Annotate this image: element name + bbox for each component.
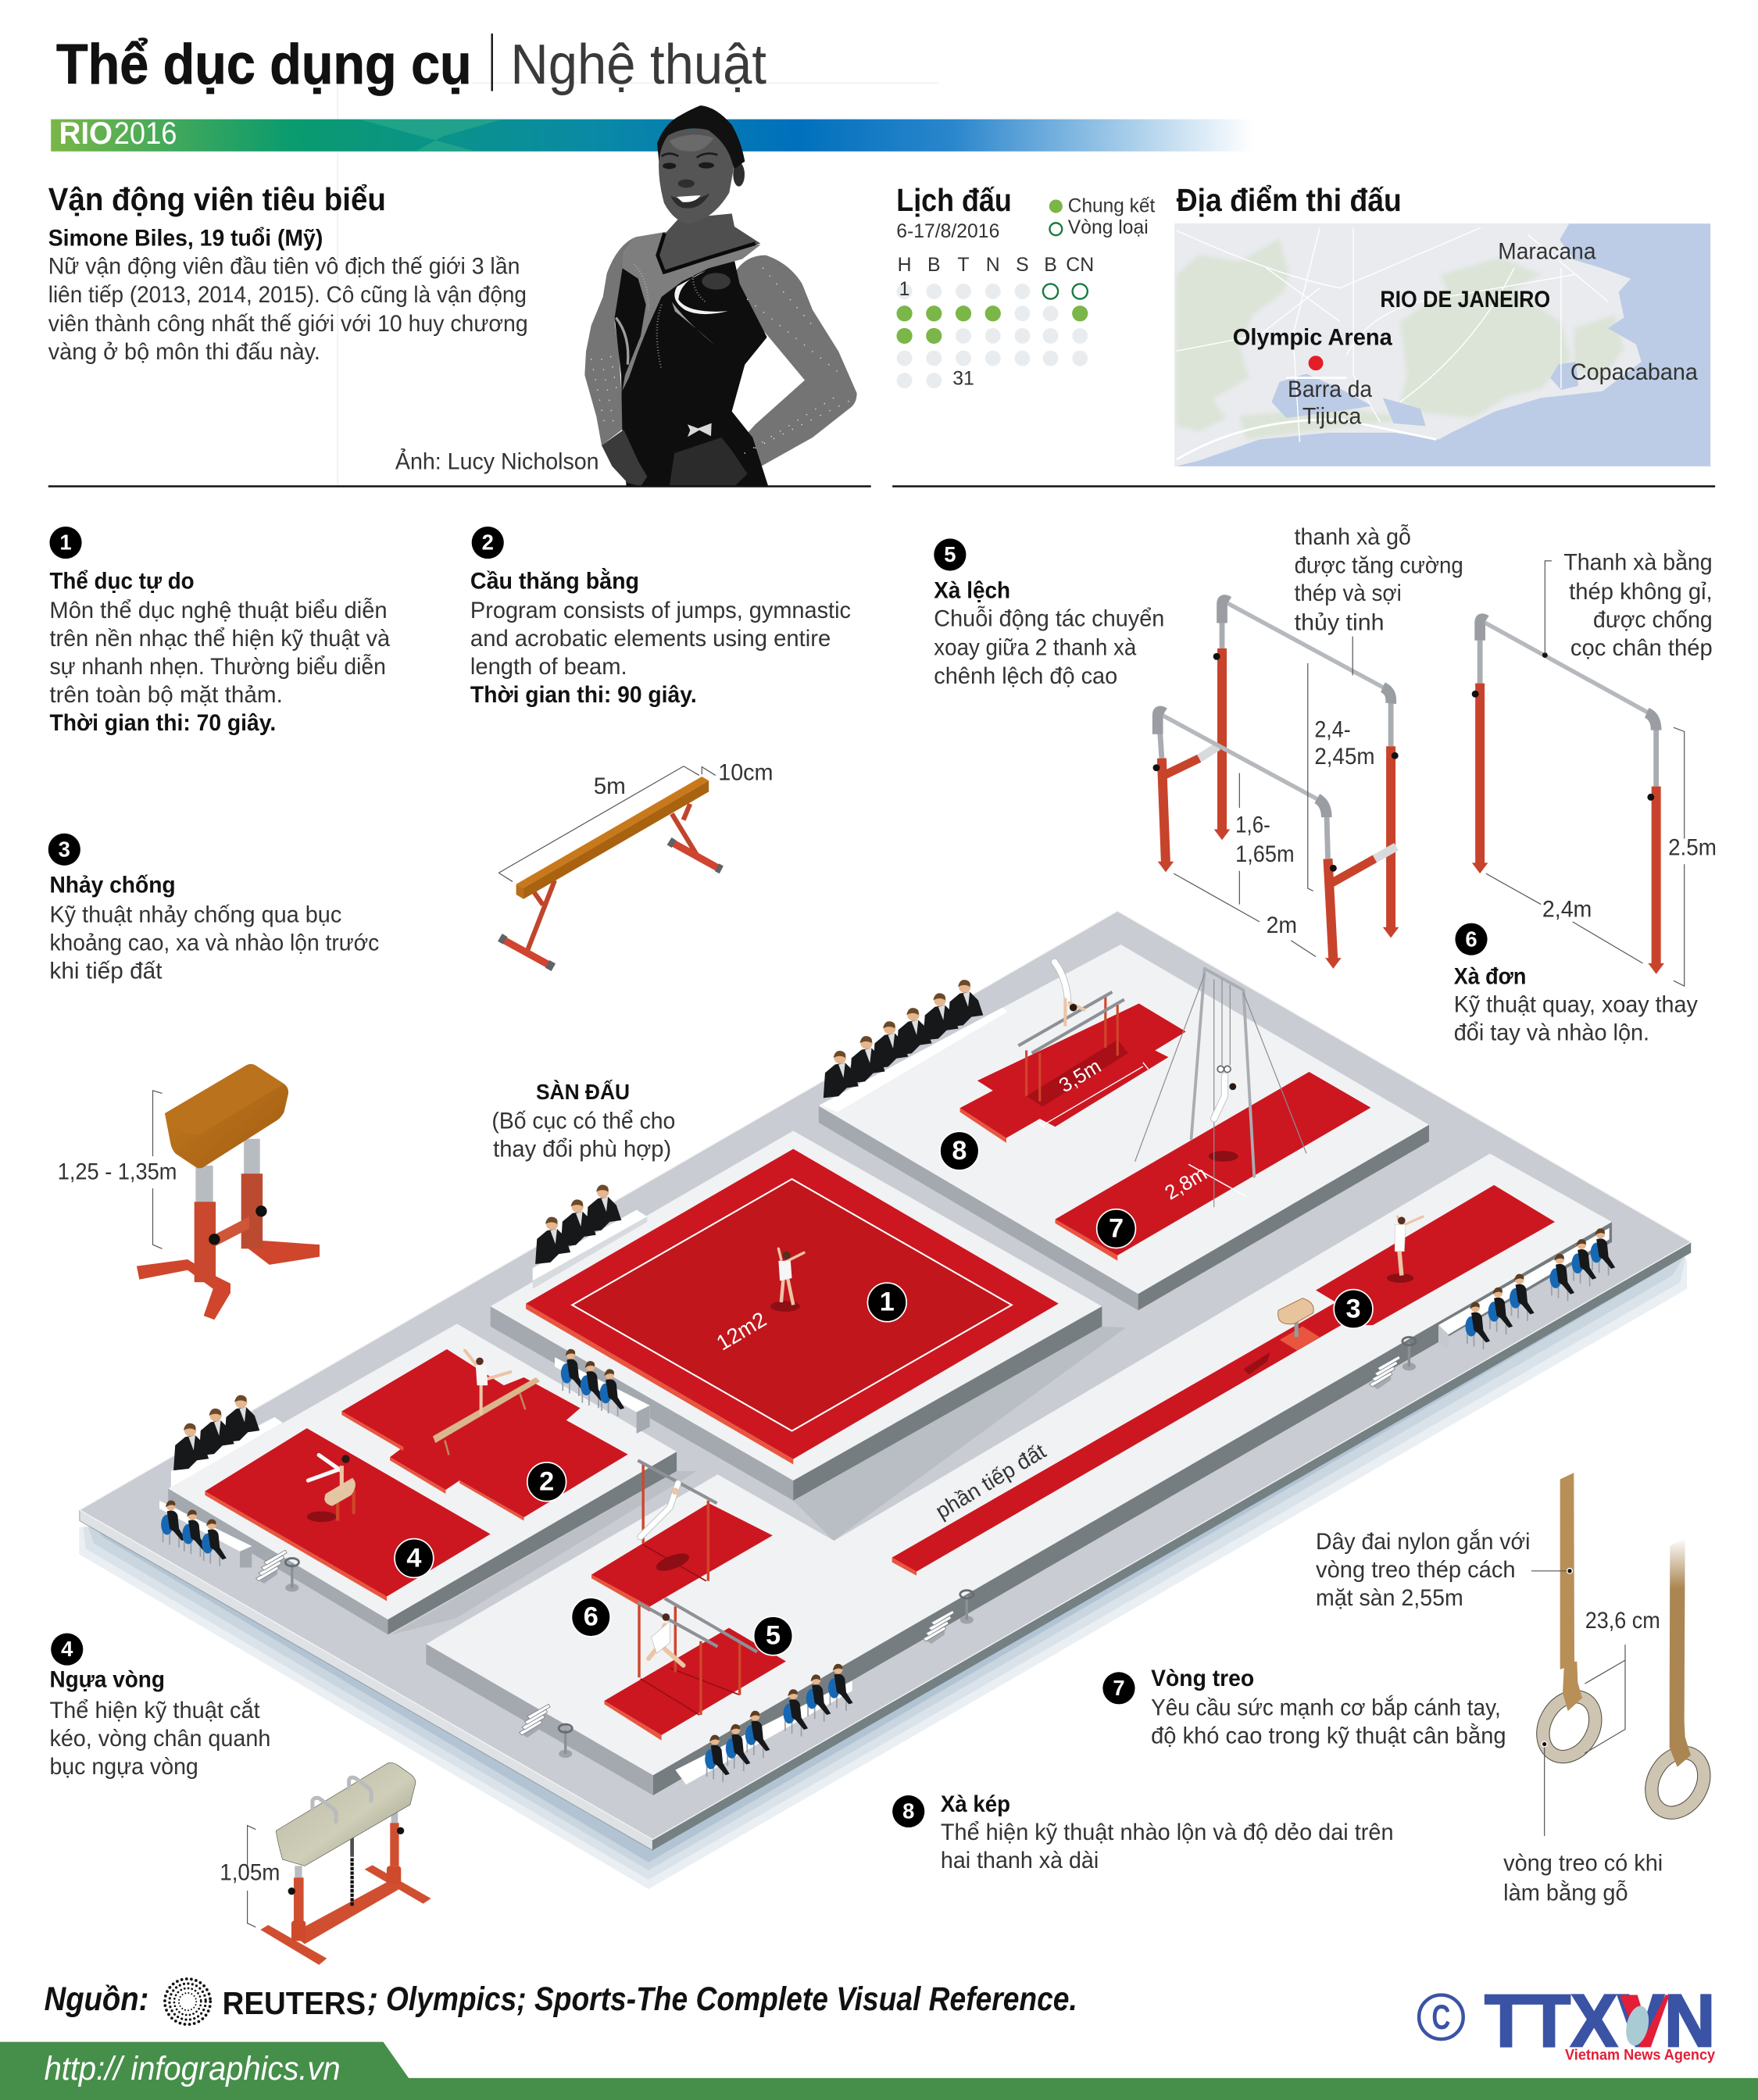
illustration: uneven bars: được tăng cường bbox=[1295, 554, 1463, 579]
text: 1 floor exercise: 1 bbox=[59, 530, 72, 555]
gymnast: floor bbox=[770, 1248, 804, 1312]
mat: rings bbox=[1056, 1072, 1370, 1261]
number markers on arena: 8 bbox=[952, 1136, 967, 1166]
arena heading: thay đổi phù hợp) bbox=[493, 1138, 671, 1162]
platform: parallel bars and rings bbox=[819, 945, 1429, 1310]
arena floor plan bbox=[79, 911, 1691, 1889]
mat: high bar bbox=[591, 1503, 773, 1612]
banner: Rio 2016 bbox=[51, 116, 1252, 152]
illustration: balance beam: 5m bbox=[594, 774, 626, 799]
mat: floor exercise bbox=[526, 1149, 1059, 1464]
text: 3 vault: Kỹ thuật nhảy chống qua bục bbox=[49, 902, 341, 927]
section rules bbox=[48, 486, 1715, 488]
neck bbox=[658, 213, 760, 273]
mat: rings: 2,8m bbox=[1161, 1162, 1211, 1205]
text: 4 pommel horse: 4 bbox=[61, 1637, 73, 1661]
text: 4 pommel horse bbox=[49, 1634, 270, 1780]
text: 7 rings: Vòng treo bbox=[1151, 1666, 1254, 1691]
mat: balance beam bbox=[341, 1349, 628, 1520]
text: 7 rings: Yêu cầu sức mạnh cơ bắp cánh tay, bbox=[1151, 1695, 1501, 1721]
text: 2 balance beam: Thời gian thi: 90 giây. bbox=[470, 683, 697, 708]
text: 7 rings: độ khó cao trong kỹ thuật cân bằng bbox=[1151, 1723, 1506, 1749]
map: Barra da bbox=[1288, 377, 1373, 402]
illustration: high bar: thép không gỉ, bbox=[1569, 580, 1713, 605]
text: 3 vault: Nhảy chống bbox=[49, 873, 176, 898]
schedule: Lịch đấu bbox=[896, 182, 1012, 218]
title: Nghệ thuật bbox=[510, 34, 766, 96]
footer band: http:// infographics.vn bbox=[45, 2050, 341, 2088]
mat: vault runway bbox=[892, 1185, 1555, 1576]
text: 2 balance beam bbox=[470, 527, 851, 708]
rear post bbox=[391, 1812, 398, 1824]
face details bbox=[662, 153, 717, 158]
platform: vault and bars bbox=[426, 1154, 1612, 1795]
athlete text: Simone Biles, 19 tuổi (Mỹ) bbox=[48, 226, 323, 251]
front post bbox=[295, 1866, 302, 1879]
text: 6 high bar: Kỹ thuật quay, xoay thay bbox=[1454, 992, 1698, 1017]
illustration: uneven bars: 1,6- bbox=[1235, 812, 1270, 838]
illustration: balance beam bbox=[498, 761, 774, 967]
judges tables bbox=[159, 1008, 1610, 1784]
text: 6 high bar bbox=[1454, 923, 1698, 1045]
source line: Olympics; Sports-The Complete Visual Reference. bbox=[386, 1980, 1077, 2018]
illustration: gymnastic rings: làm bằng gỗ bbox=[1503, 1880, 1628, 1905]
calendar: 31 bbox=[952, 368, 974, 390]
illustration: gymnastic rings: mặt sàn 2,55m bbox=[1316, 1586, 1463, 1611]
runway label: phần tiếp đất bbox=[931, 1438, 1050, 1523]
text: 3 vault: khoảng cao, xa và nhào lộn trước bbox=[49, 930, 379, 955]
text: 5 uneven bars: Xà lệch bbox=[934, 578, 1010, 603]
text: 8 parallel bars: hai thanh xà dài bbox=[941, 1848, 1099, 1873]
footer band bbox=[0, 2042, 1758, 2100]
title bbox=[56, 34, 766, 96]
number markers on arena: 5 bbox=[766, 1621, 781, 1651]
right arm bbox=[732, 255, 857, 474]
illustration: balance beam: 10cm bbox=[718, 761, 774, 786]
athlete text: viên thành công nhất thế giới với 10 huy chương bbox=[48, 312, 528, 337]
base bbox=[365, 1865, 431, 1904]
text: 4 pommel horse: bục ngựa vòng bbox=[49, 1755, 198, 1780]
illustration: uneven bars: 2m bbox=[1267, 913, 1297, 938]
calendar: 1 bbox=[899, 278, 909, 300]
illustration: uneven bars: 2,4- bbox=[1314, 718, 1351, 743]
mat: floor exercise: 12m2 bbox=[712, 1307, 770, 1355]
apparatus: balance beam bbox=[433, 1351, 540, 1455]
sleeve sparkles bbox=[591, 268, 849, 453]
schedule: 6-17/8/2016 bbox=[896, 220, 999, 242]
text: 8 parallel bars: Xà kép bbox=[941, 1792, 1010, 1817]
text: 8 parallel bars: Thể hiện kỹ thuật nhào lộn và độ dẻo dai trên bbox=[941, 1820, 1394, 1845]
text: 2 balance beam: Cầu thăng bằng bbox=[470, 567, 639, 594]
text: 5 uneven bars: xoay giữa 2 thanh xà bbox=[934, 635, 1137, 660]
text: 2 balance beam: 2 bbox=[482, 530, 494, 555]
text: 6 high bar: đổi tay và nhào lộn. bbox=[1454, 1020, 1649, 1045]
illustration: uneven bars: thủy tinh bbox=[1295, 611, 1385, 636]
illustration: uneven bars: 1,65m bbox=[1235, 842, 1295, 867]
floor shadows bbox=[793, 1327, 1126, 1541]
number markers on arena: 3 bbox=[1346, 1294, 1361, 1323]
handles bbox=[313, 1777, 371, 1822]
illustration: uneven bars: thanh xà gỗ bbox=[1295, 524, 1411, 550]
text: 5 uneven bars: chênh lệch độ cao bbox=[934, 664, 1117, 689]
athlete text: Nữ vận động viên đầu tiên vô địch thế giới 3 lần bbox=[48, 254, 520, 279]
text: 8 parallel bars bbox=[892, 1792, 1394, 1873]
text: 2 balance beam: length of beam. bbox=[470, 655, 627, 680]
gymnast: vault bbox=[1387, 1216, 1423, 1283]
ear bbox=[733, 162, 745, 187]
source line bbox=[45, 1979, 1077, 2024]
logo: TTXVN: Vietnam News Agency bbox=[1565, 2046, 1715, 2063]
map heading: Địa điểm thi đấu bbox=[1177, 182, 1402, 218]
athlete text: liên tiếp (2013, 2014, 2015). Cô cũng là vận động bbox=[48, 283, 527, 308]
mat: parallel bars: 3,5m bbox=[1056, 1055, 1105, 1097]
logo: TTXVN: C bbox=[1431, 1998, 1450, 2037]
illustration: gymnastic rings bbox=[1316, 1473, 1714, 1905]
apparatus: uneven bars bbox=[638, 1598, 757, 1715]
judges figures bbox=[161, 980, 1615, 1782]
map: Maracana bbox=[1498, 239, 1596, 264]
number markers on arena: 7 bbox=[1109, 1213, 1124, 1243]
text: 4 pommel horse: Ngựa vòng bbox=[49, 1668, 165, 1693]
illustration: high bar: được chống bbox=[1593, 608, 1713, 633]
illustration: gymnastic rings: vòng treo có khi bbox=[1503, 1852, 1663, 1877]
illustration: pommel horse: 1,05m bbox=[220, 1861, 280, 1886]
hands bbox=[602, 430, 647, 487]
illustration: uneven bars: 2,45m bbox=[1314, 745, 1375, 770]
illustration: gymnastic rings: 23,6 cm bbox=[1585, 1609, 1660, 1634]
apparatus: pommel horse bbox=[307, 1455, 356, 1522]
illustration: high bar: 2.5m bbox=[1668, 836, 1717, 861]
torso bbox=[615, 260, 768, 487]
apparatus: high bar bbox=[638, 1460, 716, 1581]
number markers on arena: 4 bbox=[406, 1543, 421, 1573]
text: 1 floor exercise: sự nhanh nhẹn. Thường biểu diễn bbox=[49, 654, 386, 680]
map: RIO DE JANEIRO bbox=[1380, 288, 1550, 312]
platform: beam and pommel bbox=[168, 1323, 677, 1634]
faint guide lines bbox=[338, 83, 938, 485]
illustration: uneven bars bbox=[1153, 524, 1463, 969]
arena heading: (Bố cục có thể cho bbox=[491, 1109, 675, 1134]
schedule bbox=[896, 182, 1155, 390]
map: Olympic Arena bbox=[1233, 325, 1393, 350]
legend: Chung kết bbox=[1068, 195, 1155, 216]
platform: floor exercise bbox=[491, 1130, 1102, 1501]
illustration: gymnastic rings: vòng treo thép cách bbox=[1316, 1558, 1516, 1583]
illustration: pommel horse bbox=[220, 1762, 431, 1965]
illustration: high bar: Thanh xà bằng bbox=[1563, 549, 1713, 575]
athlete text bbox=[48, 226, 528, 365]
mat: uneven bars bbox=[604, 1628, 786, 1741]
apparatus: parallel bars bbox=[1018, 962, 1124, 1102]
text: 6 high bar: 6 bbox=[1465, 927, 1478, 951]
mat: parallel bars bbox=[960, 1003, 1186, 1143]
text: 2 balance beam: Program consists of jumps, gymnastic bbox=[470, 598, 851, 623]
text: 3 vault: khi tiếp đất bbox=[49, 959, 163, 984]
illustration: high bar: cọc chân thép bbox=[1570, 636, 1713, 661]
text: 3 vault: 3 bbox=[59, 837, 70, 861]
illustration: gymnastic rings: Dây đai nylon gắn với bbox=[1316, 1529, 1530, 1555]
text: 1 floor exercise: Thể dục tự do bbox=[49, 569, 195, 594]
map bbox=[1174, 223, 1710, 466]
text: 1 floor exercise: trên nền nhạc thể hiện kỹ thuật và bbox=[49, 627, 391, 652]
base shadow bbox=[79, 1252, 1687, 1889]
photo: Simone Biles bbox=[584, 105, 857, 487]
illustration: uneven bars: thép và sợi bbox=[1295, 581, 1402, 606]
number markers on arena: 1 bbox=[880, 1288, 895, 1317]
text: 5 uneven bars bbox=[934, 538, 1164, 689]
logo on leotard bbox=[688, 423, 712, 437]
athlete heading: Vận động viên tiêu biểu bbox=[48, 181, 386, 217]
illustration: vault bbox=[58, 1064, 320, 1320]
source line: Nguồn: bbox=[45, 1980, 148, 2018]
text: 4 pommel horse: kéo, vòng chân quanh bbox=[49, 1727, 270, 1752]
banner: Rio 2016: 2016 bbox=[114, 116, 177, 151]
stairs and flag poles bbox=[256, 1338, 1416, 1758]
photo credit: Ảnh: Lucy Nicholson bbox=[395, 448, 599, 475]
illustration: high bar bbox=[1472, 549, 1717, 986]
legend bbox=[1049, 195, 1155, 238]
legend: Vòng loại bbox=[1068, 216, 1149, 238]
text: 3 vault bbox=[48, 834, 379, 984]
illustration: high bar: 2,4m bbox=[1542, 898, 1592, 923]
text: 7 rings: 7 bbox=[1113, 1676, 1125, 1700]
text: 7 rings bbox=[1102, 1666, 1506, 1749]
map: Tijuca bbox=[1302, 404, 1362, 429]
text: 1 floor exercise: Thời gian thi: 70 giây. bbox=[49, 711, 276, 736]
calendar: N bbox=[986, 254, 1000, 276]
text: 2 balance beam: and acrobatic elements using entire bbox=[470, 627, 831, 652]
apparatus: rings bbox=[1135, 969, 1306, 1207]
text: 6 high bar: Xà đơn bbox=[1454, 964, 1526, 989]
source line: REUTERS bbox=[223, 1985, 366, 2021]
apparatus: vault in arena bbox=[1278, 1298, 1320, 1351]
number markers on arena bbox=[395, 1131, 1373, 1655]
leotard swirls bbox=[674, 271, 728, 314]
horse body bbox=[276, 1762, 416, 1866]
calendar: H bbox=[898, 254, 912, 276]
arena heading: SÀN ĐẤU bbox=[536, 1080, 630, 1104]
illustration: vault: 1,25 - 1,35m bbox=[58, 1160, 177, 1185]
chest panel bbox=[623, 232, 760, 391]
text: 5 uneven bars: Chuỗi động tác chuyển bbox=[934, 605, 1164, 631]
map: Copacabana bbox=[1570, 360, 1699, 385]
calendar: T bbox=[957, 254, 970, 276]
text: 4 pommel horse: Thể hiện kỹ thuật cắt bbox=[49, 1698, 260, 1723]
text: 1 floor exercise: trên toàn bộ mặt thảm. bbox=[49, 683, 283, 708]
base platform bbox=[80, 911, 1691, 1850]
mat: pommel horse bbox=[205, 1428, 491, 1601]
logo: TTXVN: TTXVN bbox=[1485, 1980, 1715, 2062]
chain bbox=[350, 1838, 354, 1857]
calendar: B bbox=[927, 254, 941, 276]
text: 1 floor exercise bbox=[49, 527, 391, 736]
icon: Reuters logo bbox=[165, 1979, 210, 2024]
source line: ; bbox=[367, 1980, 378, 2018]
banner: Rio 2016: RIO bbox=[59, 116, 113, 151]
text: 5 uneven bars: 5 bbox=[944, 542, 956, 566]
number markers on arena: 2 bbox=[539, 1467, 554, 1497]
calendar: CN bbox=[1066, 254, 1094, 276]
hair bbox=[657, 105, 745, 170]
calendar: S bbox=[1016, 254, 1029, 276]
athlete text: vàng ở bộ môn thi đấu này. bbox=[48, 340, 320, 365]
arena heading bbox=[491, 1080, 675, 1162]
text: 1 floor exercise: Môn thể dục nghệ thuật biểu diễn bbox=[49, 598, 388, 623]
face bbox=[659, 128, 734, 224]
left arm bbox=[584, 237, 635, 445]
title: Thể dục dụng cụ bbox=[56, 34, 472, 96]
calendar: B bbox=[1044, 254, 1057, 276]
text: 8 parallel bars: 8 bbox=[902, 1799, 914, 1823]
calendar bbox=[896, 254, 1094, 390]
number markers on arena: 6 bbox=[584, 1602, 599, 1632]
